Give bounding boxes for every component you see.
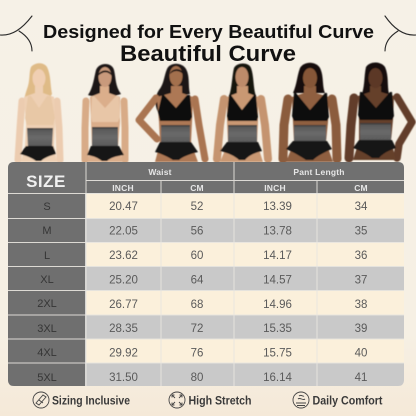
- size labels: 5XL: [37, 372, 57, 384]
- waist cm values: 56: [191, 226, 203, 238]
- pant inch values: 14.57: [263, 274, 292, 286]
- model 1: [18, 63, 60, 162]
- waist cm values: 52: [191, 201, 203, 213]
- column headings: Waist: [148, 167, 172, 177]
- pant cm values: 39: [355, 323, 367, 335]
- table grid: [8, 162, 404, 386]
- column headings: CM: [354, 183, 368, 193]
- waist inch values: 31.50: [109, 372, 138, 384]
- pant cm values: 34: [355, 201, 368, 213]
- waist inch values: 26.77: [109, 299, 138, 311]
- cream rows: [86, 194, 404, 363]
- icon: left curve ornament: [0, 16, 32, 51]
- feature: high stretch: [169, 392, 252, 408]
- pant inch values: 14.17: [263, 250, 292, 262]
- feature: daily comfort: [293, 392, 383, 408]
- model 4: [217, 64, 268, 162]
- pant inch values: 14.96: [263, 299, 292, 311]
- waist inch values: 28.35: [109, 323, 138, 335]
- column headings: INCH: [264, 183, 286, 193]
- model 6: [349, 62, 412, 160]
- size labels: S: [43, 201, 51, 213]
- waist cm values: 72: [191, 323, 203, 335]
- pant cm values: [355, 201, 368, 384]
- table base: [8, 162, 404, 386]
- waist inch values: 23.62: [109, 250, 138, 262]
- size column: [8, 193, 85, 386]
- waist inch values: 25.20: [109, 274, 138, 286]
- table header: [8, 162, 404, 193]
- column headings: CM: [190, 183, 204, 193]
- size table: [8, 162, 404, 386]
- pant cm values: 41: [355, 372, 367, 384]
- waist inch values: 20.47: [109, 201, 138, 213]
- icon: sizing: [33, 392, 49, 408]
- pant inch values: 15.75: [263, 348, 292, 360]
- icon: stretch: [169, 392, 185, 408]
- icon: right curve ornament: [385, 16, 416, 51]
- models photo row: [18, 62, 412, 162]
- pant cm values: 40: [355, 348, 367, 360]
- size labels: M: [42, 225, 52, 237]
- pant cm values: 37: [355, 274, 367, 286]
- model 3: [139, 64, 205, 162]
- waist cm values: 80: [191, 372, 203, 384]
- title: [43, 21, 374, 66]
- model 2: [85, 64, 125, 162]
- feature: high stretch: High Stretch: [188, 396, 252, 408]
- size labels: XL: [40, 274, 54, 286]
- pant inch values: 16.14: [263, 372, 292, 384]
- model 5: [283, 63, 337, 162]
- waist cm values: 76: [191, 348, 203, 360]
- pant cm values: 38: [355, 299, 367, 311]
- pant cm values: 35: [355, 226, 367, 238]
- pant inch values: [263, 201, 292, 384]
- size heading: SIZE: [26, 172, 66, 191]
- title: Beautiful Curve: [120, 41, 296, 66]
- pant inch values: 13.78: [263, 226, 292, 238]
- size labels: 4XL: [37, 347, 57, 359]
- feature: daily comfort: Daily Comfort: [312, 396, 383, 408]
- size labels: [37, 201, 57, 384]
- size labels: L: [44, 250, 50, 262]
- feature: sizing inclusive: [33, 392, 130, 408]
- waist cm values: 68: [191, 299, 203, 311]
- title: Designed for Every Beautiful Curve: [43, 21, 374, 42]
- waist inch values: 22.05: [109, 226, 138, 238]
- size labels: 3XL: [37, 323, 57, 335]
- waist inch values: [109, 201, 138, 384]
- waist cm values: 60: [191, 250, 203, 262]
- icon: comfort: [293, 392, 309, 408]
- waist cm values: 64: [191, 274, 204, 286]
- pant inch values: 15.35: [263, 323, 292, 335]
- column headings: INCH: [112, 183, 134, 193]
- waist inch values: 29.92: [109, 348, 138, 360]
- size labels: 2XL: [37, 298, 57, 310]
- column headings: Pant Length: [293, 167, 345, 177]
- pant cm values: 36: [355, 250, 367, 262]
- waist cm values: [191, 201, 204, 384]
- feature: sizing inclusive: Sizing Inclusive: [52, 396, 130, 408]
- column headings: [112, 167, 368, 193]
- pant inch values: 13.39: [263, 201, 292, 213]
